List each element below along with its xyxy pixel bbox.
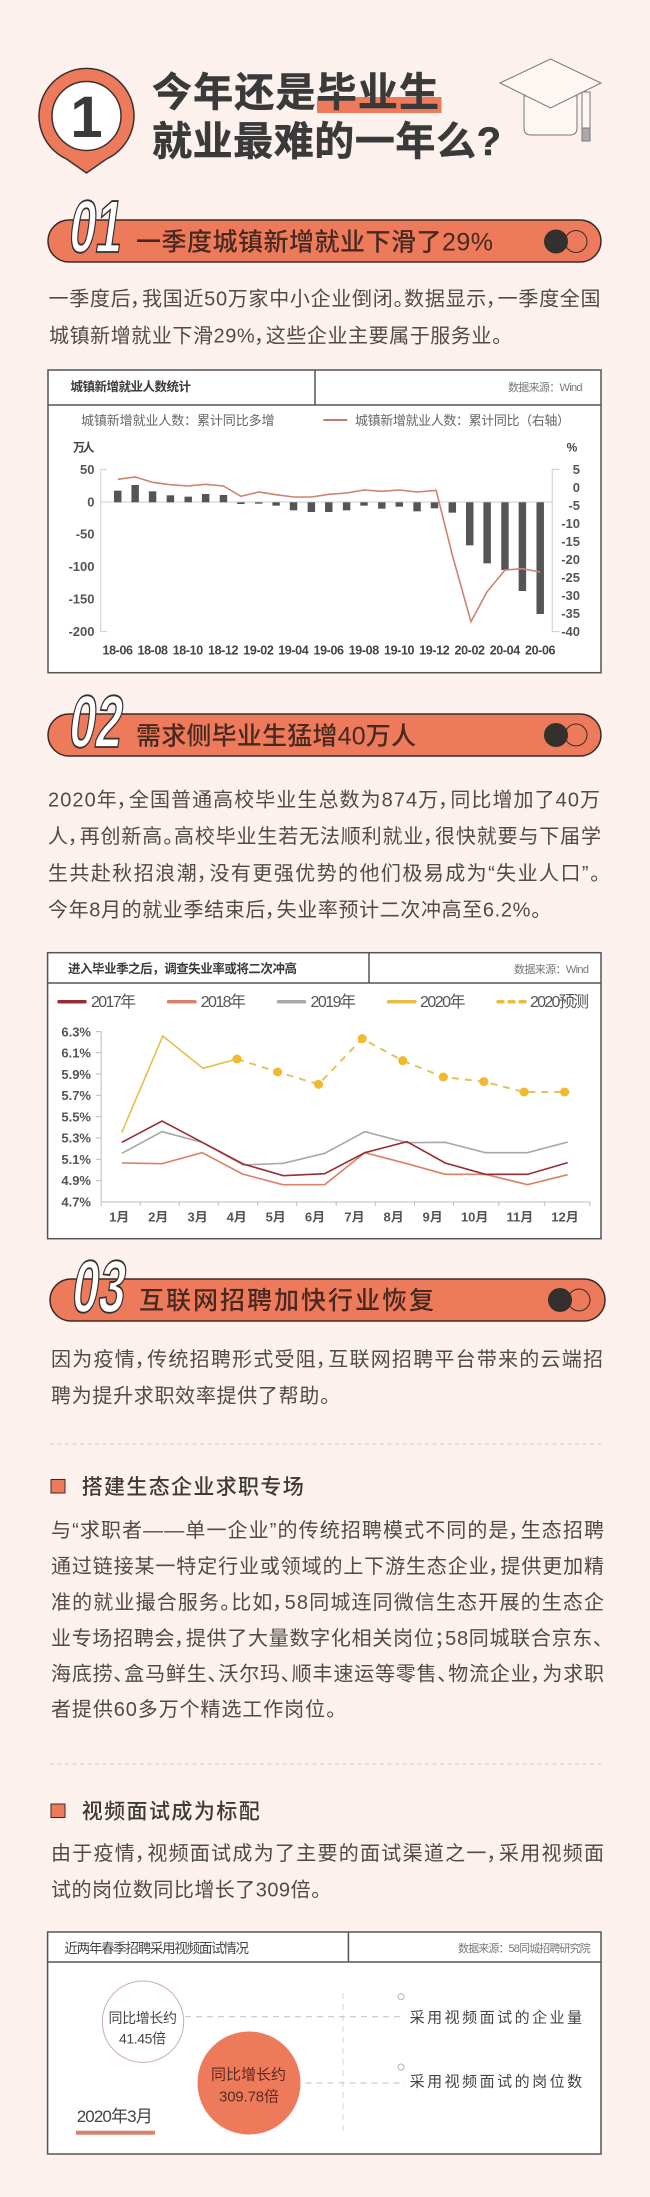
left axis labels: [68, 462, 94, 639]
bars and trend line: [101, 469, 560, 632]
left axis labels: -100: [68, 559, 94, 574]
label: enterprises: [398, 1994, 582, 2026]
title: 今年还是毕业生: [152, 71, 439, 115]
x axis labels: 1月: [109, 1210, 129, 1224]
section 02 header bar: [48, 681, 601, 764]
chart legend: 2019年: [310, 993, 356, 1011]
bubble: positions growth: 309.78倍: [219, 2088, 279, 2106]
x axis labels: 18-10: [173, 644, 203, 658]
left axis labels: -200: [68, 624, 94, 639]
right axis labels: -25: [561, 570, 580, 585]
x axis labels: 10月: [461, 1210, 488, 1224]
x axis labels: 18-12: [208, 644, 239, 658]
section 03 text: 聘为提升求职效率提供了帮助。: [51, 1384, 330, 1408]
x axis labels: 19-04: [278, 644, 309, 658]
data source: 数据来源：58同城招聘研究院: [458, 1941, 591, 1955]
x axis labels: [109, 1210, 579, 1224]
x axis labels: 5月: [266, 1210, 286, 1224]
right axis labels: [561, 462, 580, 639]
x axis labels: 3月: [187, 1210, 208, 1224]
x axis labels: 19-10: [384, 644, 415, 658]
y axis labels: 5.5%: [61, 1110, 91, 1124]
y axis labels: 5.7%: [61, 1088, 91, 1103]
right axis labels: -10: [561, 516, 580, 531]
x axis labels: 20-02: [454, 644, 485, 658]
y axis labels: 4.9%: [61, 1173, 91, 1188]
y axis labels: 5.9%: [61, 1067, 91, 1082]
x axis labels: [102, 644, 556, 658]
y axis labels: 5.3%: [61, 1130, 91, 1146]
label: enterprises: 采用视频面试的企业量: [410, 2008, 582, 2026]
ecosystem paragraph: 者提供60多万个精选工作岗位。: [51, 1698, 336, 1721]
line series: [96, 1032, 590, 1206]
panel: video interview bubbles: [48, 1932, 601, 2154]
bubble: positions growth: [198, 2032, 300, 2134]
bubble: positions growth: 同比增长约: [211, 2067, 286, 2084]
title: [152, 71, 501, 164]
chart title: 进入毕业季之后，调查失业率或将二次冲高: [68, 961, 297, 976]
y axis labels: [61, 1024, 91, 1210]
video interview paragraph: 由于疫情，视频面试成为了主要的面试渠道之一，采用视频面: [51, 1842, 604, 1865]
left axis labels: 50: [80, 462, 94, 477]
left axis labels: -150: [68, 592, 94, 606]
section 01 text: 一季度后，我国近50万家中小企业倒闭。数据显示，一季度全国: [48, 288, 600, 310]
icon: graduation cap: [500, 59, 601, 141]
icon: number pin badge: [39, 68, 134, 173]
subheading: ecosystem job fairs: 搭建生态企业求职专场: [82, 1476, 304, 1499]
panel: unemployment line chart: [48, 953, 601, 1239]
x axis labels: 20-04: [490, 644, 520, 658]
data source: 数据来源：Wind: [508, 380, 582, 394]
date label: [76, 2107, 155, 2135]
chart legend: 2020年: [420, 993, 466, 1011]
left axis labels: 0: [87, 494, 94, 510]
section 01 header bar: 一季度城镇新增就业下滑了29%: [136, 228, 493, 256]
x axis labels: 20-06: [525, 644, 556, 658]
chart title: 近两年春季招聘采用视频面试情况: [64, 1941, 250, 1956]
chart legend: 2020预测: [530, 993, 589, 1011]
bubble: enterprises growth: 41.45倍: [119, 2030, 166, 2046]
data source: 数据来源：Wind: [514, 962, 589, 976]
section 02 text: 2020年，全国普通高校毕业生总数为874万，同比增加了40万: [48, 788, 600, 812]
section 01 header bar: 01: [65, 186, 129, 269]
chart legend: 城镇新增就业人数：累计同比（右轴）: [355, 413, 570, 428]
ecosystem paragraph: 海底捞、盒马鲜生、沃尔玛、顺丰速运等零售、物流企业，为求职: [51, 1662, 604, 1686]
right axis labels: -20: [561, 552, 580, 567]
right axis labels: -30: [561, 588, 580, 603]
right axis labels: 0: [573, 480, 580, 495]
bubble: enterprises growth: 同比增长约: [108, 2010, 177, 2026]
x axis labels: 19-12: [419, 644, 450, 658]
x axis labels: 19-06: [314, 644, 344, 658]
right axis labels: -35: [561, 606, 580, 621]
ecosystem paragraph: [51, 1519, 604, 1721]
section 02 text: [48, 788, 601, 922]
x axis labels: 4月: [227, 1210, 247, 1224]
chart title: 城镇新增就业人数统计: [70, 379, 191, 394]
x axis labels: 19-08: [349, 644, 379, 658]
section 02 text: 人，再创新高。高校毕业生若无法顺利就业，很快就要与下届学: [48, 825, 601, 848]
section 01 text: 城镇新增就业下滑29%，这些企业主要属于服务业。: [49, 324, 502, 348]
label: positions: [398, 2064, 582, 2090]
video interview paragraph: 试的岗位数同比增长了309倍。: [51, 1878, 321, 1902]
y axis labels: 6.3%: [61, 1024, 91, 1040]
chart legend: [59, 993, 589, 1011]
bubble: enterprises growth: [102, 1981, 184, 2062]
section 02 text: 生共赴秋招浪潮，没有更强优势的他们极易成为“失业人口”。: [48, 862, 600, 885]
axis units: [73, 440, 578, 454]
section 02 text: 今年8月的就业季结束后，失业率预计二次冲高至6.2%。: [48, 898, 541, 922]
label: positions: 采用视频面试的岗位数: [410, 2074, 582, 2090]
section 02 header bar: 02: [65, 681, 129, 764]
subheading: video interviews: 视频面试成为标配: [82, 1800, 260, 1824]
x axis labels: 7月: [344, 1210, 365, 1224]
video interview paragraph: [51, 1842, 604, 1902]
ecosystem paragraph: 与“求职者——单一企业”的传统招聘模式不同的是，生态招聘: [51, 1519, 604, 1542]
right axis labels: -15: [561, 534, 580, 549]
x axis labels: 6月: [305, 1210, 325, 1224]
x axis labels: 9月: [422, 1210, 443, 1224]
right axis labels: -40: [561, 624, 580, 639]
left axis labels: -50: [76, 526, 94, 542]
section 01 text: [48, 288, 600, 348]
y axis labels: 5.1%: [61, 1152, 91, 1167]
chart legend: 城镇新增就业人数：累计同比多增: [81, 413, 274, 428]
section 03 header bar: 互联网招聘加快行业恢复: [139, 1287, 434, 1315]
section 02 header bar: 需求侧毕业生猛增40万人: [136, 722, 416, 750]
chart legend: 2018年: [201, 993, 246, 1011]
y axis labels: 6.1%: [61, 1046, 91, 1060]
section 01 header bar: [48, 186, 601, 269]
axis units: 万人: [73, 440, 94, 454]
right axis labels: -5: [568, 498, 580, 513]
section 03 text: 因为疫情，传统招聘形式受阻，互联网招聘平台带来的云端招: [51, 1348, 603, 1371]
section 03 header bar: 03: [68, 1246, 132, 1329]
x axis labels: 12月: [551, 1210, 579, 1224]
title: 就业最难的一年么?: [152, 120, 501, 164]
x axis labels: 18-08: [138, 644, 168, 658]
x axis labels: 19-02: [243, 644, 274, 658]
x axis labels: 8月: [383, 1210, 404, 1224]
ecosystem paragraph: 准的就业撮合服务。比如，58同城连同微信生态开展的生态企: [51, 1591, 604, 1614]
ecosystem paragraph: 通过链接某一特定行业或领域的上下游生态企业，提供更加精: [51, 1555, 604, 1578]
section 03 header bar: [50, 1246, 605, 1329]
axis units: %: [567, 440, 578, 454]
section 03 text: [51, 1348, 603, 1408]
panel: employment bar and line chart: [48, 370, 601, 673]
x axis labels: 2月: [148, 1210, 168, 1224]
chart legend: 2017年: [91, 993, 136, 1011]
icon: number pin badge: 1: [70, 85, 103, 150]
chart legend: [81, 413, 570, 428]
x axis labels: 18-06: [102, 644, 133, 658]
x axis labels: 11月: [507, 1210, 533, 1224]
y axis labels: 4.7%: [61, 1194, 91, 1210]
date label: 2020年3月: [77, 2107, 153, 2126]
ecosystem paragraph: 业专场招聘会，提供了大量数字化相关岗位；58同城联合京东、: [51, 1627, 603, 1650]
right axis labels: 5: [573, 462, 580, 477]
